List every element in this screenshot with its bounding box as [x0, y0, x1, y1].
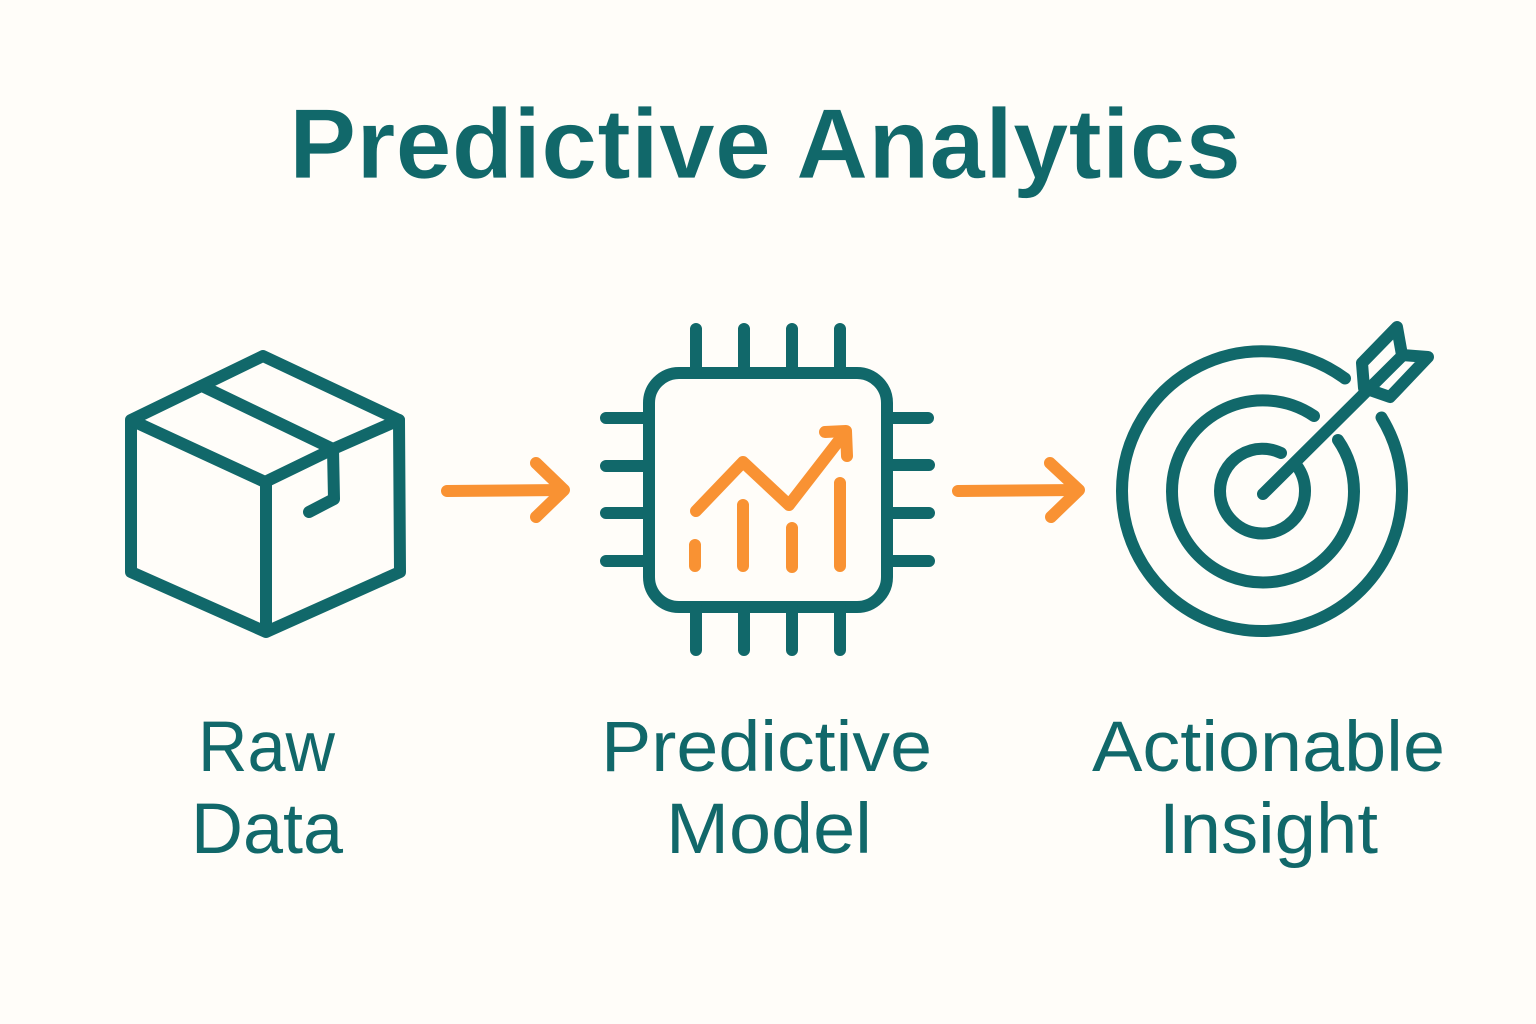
icon: target with arrow: [1122, 327, 1428, 631]
chart: rising trend and bars: [695, 431, 847, 567]
label: actionable insight: Actionable: [1092, 708, 1445, 787]
label: raw data: [191, 708, 344, 869]
icon: predictive model chip: [606, 329, 929, 650]
title: Analytics: [796, 88, 1241, 199]
label: predictive model: Model: [666, 790, 872, 869]
arrow: data to model: [447, 463, 564, 517]
title: [289, 88, 1241, 199]
label: predictive model: [601, 708, 932, 869]
label: actionable insight: [1092, 708, 1445, 869]
arrow: model to insight: [958, 463, 1079, 517]
title: Predictive: [289, 88, 771, 199]
label: raw data: Data: [191, 790, 344, 869]
icon: raw data box: [131, 356, 400, 632]
label: actionable insight: Insight: [1159, 790, 1378, 869]
label: predictive model: Predictive: [601, 708, 932, 787]
label: raw data: Raw: [198, 708, 336, 787]
